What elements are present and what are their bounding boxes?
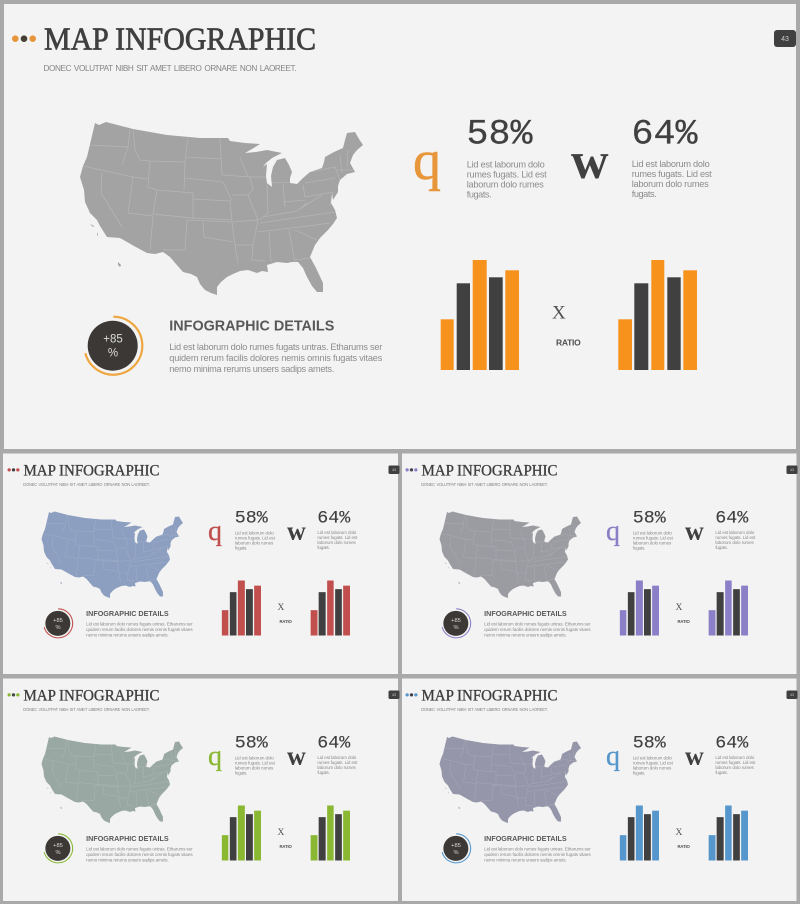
bar chart: left (222, 580, 261, 636)
stat: 64%: 64% (632, 114, 699, 154)
details text: nemo minima rerums unsers sadips amets. (86, 858, 169, 862)
stat: 58%: 58% (466, 114, 534, 154)
stat: 64%: laborum dolo rumes (317, 540, 357, 545)
stat: 64%: rumes fugats. Lid est (632, 169, 712, 179)
icon: q: q (606, 516, 620, 547)
page number badge: 43 (392, 468, 396, 472)
icon: w: w (685, 742, 704, 770)
details heading: INFOGRAPHIC DETAILS (484, 609, 567, 618)
badge: +85% (85, 317, 142, 375)
page number badge (786, 466, 798, 474)
badge: +85% (44, 609, 73, 638)
stat: 64%: rumes fugats. Lid est (715, 760, 756, 765)
details text: nemo minima rerums unsers sadips amets. (86, 632, 169, 638)
details heading: INFOGRAPHIC DETAILS (169, 319, 335, 335)
stat: 58%: Lid est laborum dolo (633, 755, 672, 760)
title dots (406, 468, 418, 472)
badge: +85%: % (55, 850, 61, 856)
stat: 64%: rumes fugats. Lid est (317, 760, 358, 765)
stat: 64%: 64% (317, 733, 351, 753)
stat: 58%: 58% (235, 508, 268, 528)
stat: 64% (715, 508, 756, 550)
stat: 64%: 64% (715, 733, 749, 753)
panel: green variant (3, 678, 400, 901)
badge: +85%: % (453, 625, 459, 631)
stat: 58%: 58% (633, 733, 666, 753)
stat: 64% (317, 508, 358, 550)
stat: 64%: Lid est laborum dolo (317, 530, 357, 535)
stat: 64%: fugats. (317, 545, 330, 550)
stat: 58%: laborum dolo rumes (235, 765, 274, 770)
details text: Lid est laborum dolo rumes fugats untras. Etharums ser (169, 342, 382, 352)
stat: 64%: fugats. (715, 545, 728, 550)
page number badge: 43 (781, 36, 789, 43)
details text (86, 846, 193, 862)
bar chart: left (222, 806, 261, 860)
ratio label (676, 603, 691, 624)
stat: 58%: Lid est laborum dolo (235, 530, 274, 535)
stat: 58%: rumes fugats. Lid est (633, 760, 674, 765)
details text: nemo minima rerums unsers sadips amets. (484, 858, 567, 862)
badge: +85%: % (453, 850, 459, 856)
stat: 64%: fugats. (317, 770, 330, 775)
ratio label: RATIO (556, 337, 581, 347)
title dots (406, 693, 418, 696)
panel: blue variant (402, 678, 798, 901)
page number badge (774, 30, 796, 47)
subtitle: DONEC VOLUTPAT NIBH SIT AMET LIBERO ORNARE NON LAOREET. (44, 64, 296, 73)
details text (86, 622, 193, 638)
map: United States (440, 512, 581, 598)
details text (484, 846, 591, 862)
ratio label: RATIO (280, 844, 293, 849)
bar chart: right (311, 580, 350, 636)
page number badge: 43 (392, 693, 396, 697)
title dots (12, 35, 36, 42)
title: MAP INFOGRAPHIC (422, 462, 558, 479)
badge: +85% (442, 834, 471, 863)
stat: 64%: 64% (317, 508, 351, 528)
stat: 64%: rumes fugats. Lid est (317, 535, 358, 540)
page number badge (786, 690, 798, 699)
map: United States (440, 736, 581, 823)
icon: q: q (208, 741, 222, 772)
title: MAP INFOGRAPHIC (24, 462, 160, 479)
bar chart: right (618, 260, 697, 370)
stat: 64% (715, 733, 756, 775)
bar chart: left (620, 806, 659, 860)
stat: 64%: fugats. (632, 189, 657, 199)
stat: 64%: laborum dolo rumes (715, 765, 755, 770)
badge: +85%: % (55, 625, 61, 631)
ratio label: RATIO (678, 844, 691, 849)
stat: 64%: Lid est laborum dolo (632, 159, 710, 169)
details text: nemo minima rerums unsers sadips amets. (169, 364, 334, 374)
stat: 58%: fugats. (467, 190, 492, 200)
badge: +85%: +85 (451, 618, 461, 624)
stat: 58%: laborum dolo rumes (467, 180, 544, 190)
badge: +85%: +85 (53, 843, 63, 849)
details text: nemo minima rerums unsers sadips amets. (484, 632, 567, 638)
badge: +85% (442, 609, 471, 638)
details text: quidem rerum facilis dolores nemis omnis fugats vitaes (86, 852, 193, 857)
details text: quidem rerum facilis dolores nemis omnis fugats vitaes (169, 353, 383, 363)
panel: red variant (3, 454, 400, 674)
panel: purple variant (402, 454, 798, 674)
ratio label: X (278, 603, 284, 613)
ratio label: RATIO (678, 619, 691, 624)
icon: w: w (685, 516, 704, 546)
badge: +85%: +85 (451, 843, 461, 849)
ratio label (676, 828, 691, 849)
stat: 58% (633, 733, 674, 775)
details heading: INFOGRAPHIC DETAILS (86, 834, 169, 843)
stat: 58%: Lid est laborum dolo (633, 530, 672, 535)
page number badge (388, 690, 400, 699)
bar chart: right (709, 580, 748, 636)
stat: 58%: fugats. (633, 770, 645, 775)
stat: 58%: fugats. (235, 770, 247, 775)
stat: 58%: 58% (633, 508, 666, 528)
map: United States (42, 736, 183, 823)
badge: +85%: +85 (53, 618, 63, 624)
stat: 58%: rumes fugats. Lid est (235, 760, 276, 765)
stat: 58% (235, 733, 276, 775)
stat: 64%: laborum dolo rumes (632, 179, 709, 189)
stat: 64%: fugats. (715, 770, 728, 775)
details text (169, 342, 383, 374)
stat: 58%: fugats. (235, 545, 247, 550)
stat: 64%: Lid est laborum dolo (715, 530, 755, 535)
ratio label: X (278, 828, 284, 838)
details text: Lid est laborum dolo rumes fugats untras. Etharums ser (484, 622, 591, 626)
stat: 64%: laborum dolo rumes (715, 540, 755, 545)
stat: 64% (317, 733, 358, 775)
bar chart: right (311, 806, 350, 860)
badge: +85%: % (108, 348, 118, 360)
map: United States (80, 122, 363, 295)
stat: 64%: laborum dolo rumes (317, 765, 357, 770)
details text: quidem rerum facilis dolores nemis omnis fugats vitaes (484, 627, 591, 632)
stat: 64%: Lid est laborum dolo (317, 755, 357, 760)
details text: quidem rerum facilis dolores nemis omnis fugats vitaes (86, 627, 193, 632)
ratio label (552, 302, 581, 347)
subtitle: DONEC VOLUTPAT NIBH SIT AMET LIBERO ORNARE NON LAOREET. (23, 482, 150, 487)
subtitle: DONEC VOLUTPAT NIBH SIT AMET LIBERO ORNARE NON LAOREET. (421, 707, 548, 712)
stat: 58%: laborum dolo rumes (235, 540, 274, 545)
panel: main slide (4, 4, 796, 449)
details text (484, 622, 591, 638)
subtitle: DONEC VOLUTPAT NIBH SIT AMET LIBERO ORNARE NON LAOREET. (421, 482, 548, 487)
details heading: INFOGRAPHIC DETAILS (484, 834, 567, 843)
ratio label (278, 828, 293, 849)
bar chart: right (709, 806, 748, 860)
details text: Lid est laborum dolo rumes fugats untras. Etharums ser (484, 846, 591, 852)
title: MAP INFOGRAPHIC (422, 687, 558, 704)
ratio label: X (552, 302, 566, 324)
details heading: INFOGRAPHIC DETAILS (86, 609, 169, 618)
stat: 64% (632, 114, 712, 199)
stat: 58%: 58% (235, 733, 268, 753)
stat: 58%: fugats. (633, 545, 645, 550)
map: United States (42, 512, 183, 598)
badge: +85% (44, 834, 73, 863)
details text: Lid est laborum dolo rumes fugats untras. Etharums ser (86, 846, 193, 852)
stat: 64%: rumes fugats. Lid est (715, 535, 756, 540)
details text: Lid est laborum dolo rumes fugats untras. Etharums ser (86, 622, 193, 626)
title dots (8, 693, 20, 696)
stat: 58%: laborum dolo rumes (633, 765, 672, 770)
title: MAP INFOGRAPHIC (44, 20, 316, 56)
stat: 58%: rumes fugats. Lid est (235, 535, 276, 540)
icon: w: w (571, 133, 609, 190)
details text: quidem rerum facilis dolores nemis omnis fugats vitaes (484, 852, 591, 857)
bar chart: left (441, 260, 519, 370)
ratio label: X (676, 828, 682, 838)
stat: 58%: rumes fugats. Lid est (633, 535, 674, 540)
icon: q: q (606, 741, 620, 772)
stat: 58% (633, 508, 674, 550)
stat: 64%: 64% (715, 508, 749, 528)
stat: 58%: Lid est laborum dolo (467, 160, 545, 170)
stat: 58% (466, 114, 547, 200)
title dots (8, 468, 20, 472)
page number badge: 43 (790, 468, 794, 472)
ratio label: X (676, 603, 682, 613)
icon: q: q (208, 516, 222, 547)
stat: 58%: laborum dolo rumes (633, 540, 672, 545)
page number badge (388, 466, 400, 474)
icon: w: w (287, 516, 306, 546)
icon: w: w (287, 742, 306, 770)
stat: 64%: Lid est laborum dolo (715, 755, 755, 760)
stat: 58%: Lid est laborum dolo (235, 755, 274, 760)
ratio label: RATIO (280, 619, 293, 624)
ratio label (278, 603, 293, 624)
title: MAP INFOGRAPHIC (24, 687, 160, 704)
badge: +85%: +85 (103, 334, 123, 346)
icon: q: q (413, 130, 441, 192)
stat: 58% (235, 508, 276, 550)
bar chart: left (620, 580, 659, 636)
stat: 58%: rumes fugats. Lid est (467, 170, 547, 180)
page number badge: 43 (790, 693, 794, 697)
subtitle: DONEC VOLUTPAT NIBH SIT AMET LIBERO ORNARE NON LAOREET. (23, 707, 150, 712)
